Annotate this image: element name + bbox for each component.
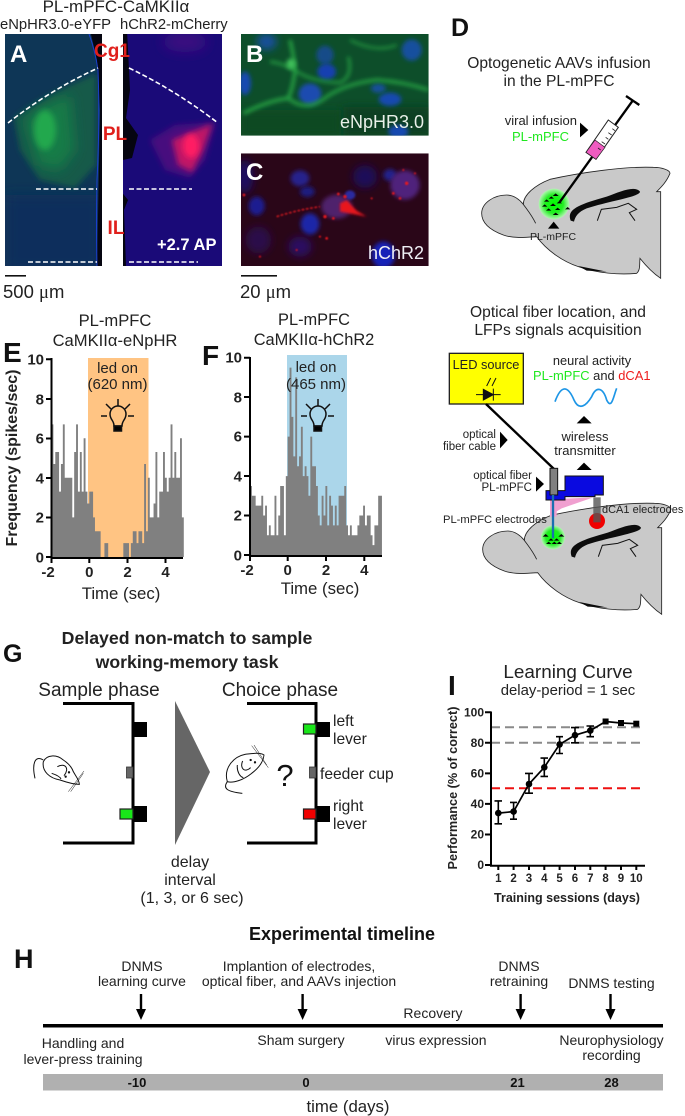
- y tick labels: 0: [36, 550, 44, 566]
- panel G: DNMS task: [3, 628, 394, 907]
- upper labels: retraining: [490, 973, 548, 989]
- cell triangles: [543, 534, 564, 544]
- label: dCA1 electrodes: dCA1 electrodes: [602, 504, 684, 516]
- upper labels: Implantion of electrodes,: [223, 958, 375, 974]
- y axis title: Frequency (spikes/sec): [4, 370, 21, 546]
- x tick labels: 4: [360, 562, 369, 579]
- label: wireless transmitter: wireless: [561, 429, 609, 444]
- label: hChR2: hChR2: [368, 243, 424, 263]
- x axis title: Time (sec): [82, 584, 160, 603]
- curve: [498, 722, 636, 813]
- icon: light bulb: [301, 399, 334, 431]
- histogram bars: [52, 424, 184, 557]
- label: viral infusion: viral infusion: [505, 113, 577, 128]
- delay label: (1, 3, or 6 sec): [140, 890, 244, 907]
- label: optical fiber cable: fiber cable: [443, 441, 496, 453]
- heading: working-memory task: [95, 652, 279, 672]
- brain with implant: [483, 503, 671, 614]
- upper labels: DNMS: [498, 958, 540, 974]
- led on window: [287, 355, 347, 555]
- x tick labels: 4: [161, 564, 170, 581]
- panel D upper: AAV infusion schematic: [451, 14, 670, 278]
- letter F: F: [202, 340, 219, 371]
- lever and cup labels: right: [333, 798, 364, 815]
- y tick labels: 8: [234, 390, 242, 406]
- label: optical fiber PL-mPFC: PL-mPFC: [482, 482, 532, 494]
- dashed region boundaries: [8, 68, 218, 262]
- delay arrow: [175, 701, 210, 845]
- arrowhead: PL-mPFC: [548, 222, 559, 229]
- fiber and electrode shaft: [549, 495, 556, 538]
- day labels: 28: [604, 1075, 619, 1090]
- axes: [485, 712, 645, 870]
- led label: (620 nm): [87, 376, 148, 393]
- histogram bars: [250, 368, 382, 555]
- brain with syringe: [482, 96, 670, 278]
- arrowhead: infusion: [580, 123, 588, 137]
- choice chamber: [247, 704, 330, 843]
- hippocampus: [571, 525, 641, 608]
- x tick labels: 8: [602, 873, 609, 885]
- brain outline: [483, 503, 671, 614]
- day labels: 21: [510, 1075, 525, 1090]
- delay label: interval: [164, 872, 216, 889]
- x tick labels: -2: [240, 562, 254, 579]
- x axis title: Time (sec): [281, 579, 359, 598]
- lever and cup labels: lever: [333, 731, 367, 748]
- x tick labels: 2: [123, 564, 132, 581]
- arrows: [136, 994, 616, 1020]
- letter B: B: [246, 41, 263, 68]
- panel I: learning curve: [446, 662, 645, 905]
- panel B: eNpHR3.0 micrograph: [239, 33, 430, 138]
- dCA1 recording site: [589, 513, 605, 529]
- panel A: brain sections: [0, 0, 228, 303]
- lower labels: recording: [582, 1047, 641, 1063]
- y tick labels: 40: [471, 797, 484, 811]
- scale bar 20 um: 20 μm: [240, 281, 291, 303]
- led label: (465 nm): [286, 376, 346, 393]
- upper labels: DNMS testing: [568, 975, 655, 991]
- letter C: C: [246, 159, 263, 186]
- lower labels: Sham surgery: [257, 1032, 345, 1048]
- day band: [43, 1074, 663, 1090]
- x tick labels: 2: [510, 873, 517, 885]
- letter D: D: [451, 14, 469, 42]
- delay label: delay: [171, 854, 209, 871]
- label: +2.7 AP: +2.7 AP: [157, 236, 216, 254]
- axis label: time (days): [306, 1097, 390, 1116]
- y tick labels: 2: [234, 508, 242, 524]
- x tick labels: 10: [630, 873, 643, 885]
- lever and cup labels: left: [333, 713, 354, 730]
- letter G: G: [3, 640, 22, 668]
- letter H: H: [14, 944, 34, 974]
- heading: PL-mPFC: [278, 311, 350, 329]
- axes: [46, 358, 183, 563]
- icon: mouse in sample phase: [34, 756, 84, 792]
- y tick labels: 10: [225, 350, 242, 366]
- y tick labels: 100: [464, 706, 484, 720]
- y tick labels: 6: [36, 430, 44, 448]
- green infusion site: [539, 189, 569, 219]
- micrograph: red section: [120, 30, 222, 266]
- label: wireless transmitter: transmitter: [554, 443, 616, 458]
- y tick labels: 4: [36, 470, 45, 488]
- hippocampus: [570, 189, 640, 272]
- label: choice phase: Choice phase: [222, 680, 338, 701]
- reference dashed lines: [491, 727, 645, 788]
- upper labels: DNMS: [121, 958, 163, 974]
- lower labels: lever-press training: [23, 1051, 143, 1067]
- lower labels: Handling and: [42, 1035, 124, 1051]
- label: LED source: LED source: [453, 357, 519, 372]
- letter E: E: [3, 337, 22, 368]
- label: optical fiber PL-mPFC: optical fiber: [473, 470, 532, 482]
- y tick labels: 6: [234, 428, 242, 446]
- panel C: hChR2 micrograph: [237, 153, 429, 268]
- arrowheads: [500, 416, 592, 492]
- label: PL-mPFC site: PL-mPFC: [530, 231, 576, 243]
- lever and cup labels: feeder cup: [320, 766, 394, 783]
- axes: [244, 357, 382, 561]
- heading: Learning Curve: [503, 662, 633, 683]
- question mark: ?: [276, 758, 294, 793]
- icon: light bulb: [101, 399, 134, 431]
- x tick labels: 5: [556, 873, 563, 885]
- label: neural activity: neural activity: [553, 353, 632, 368]
- transmitter: [546, 476, 603, 500]
- y tick labels: 0: [477, 858, 484, 872]
- region label: Cg1: Cg1: [94, 41, 130, 62]
- day labels: -10: [128, 1075, 146, 1090]
- x tick labels: 6: [572, 873, 578, 885]
- upper labels: optical fiber, and AAVs injection: [202, 973, 396, 989]
- y axis title: Performance (% of correct): [446, 707, 460, 869]
- upper labels: Recovery: [403, 1005, 463, 1021]
- heading: AAV infusion: in the PL-mPFC: [504, 73, 614, 90]
- heading: PL-mPFC: [79, 311, 151, 330]
- label: sample phase: Sample phase: [38, 680, 160, 701]
- heading: optical fiber: LFPs signals acquisition: [474, 322, 642, 339]
- y tick labels: 20: [471, 828, 484, 842]
- x tick labels: 0: [284, 562, 292, 579]
- x tick labels: 0: [85, 564, 93, 581]
- x tick labels: 2: [322, 562, 330, 579]
- y tick labels: 0: [234, 548, 242, 564]
- PL-mPFC recording site: [541, 525, 565, 549]
- hippocampal detail: [598, 539, 638, 557]
- brain outline: [482, 167, 670, 278]
- fiber cable: [486, 404, 554, 469]
- label: regions: PL-mPFC and dCA1: [533, 368, 651, 383]
- diode symbol: [476, 378, 501, 401]
- label: optical fiber cable: optical: [463, 429, 496, 441]
- lever and cup labels: lever: [333, 816, 367, 833]
- heading: optical fiber: Optical fiber location, and: [470, 304, 646, 321]
- y tick labels: 4: [234, 468, 243, 486]
- icon: mouse in choice phase: [226, 745, 268, 793]
- bulb junction: [523, 204, 536, 223]
- syringe liquid: [586, 140, 605, 159]
- letter A: A: [10, 41, 27, 68]
- sample chamber: [63, 704, 147, 843]
- x tick labels: 7: [587, 873, 594, 885]
- signal wave: [555, 388, 617, 406]
- timeline bar: [43, 1024, 663, 1028]
- syringe ticks: [598, 129, 615, 150]
- fiber ferrule: [550, 468, 558, 495]
- cell triangles: [542, 193, 570, 215]
- region label: PL: PL: [103, 124, 128, 145]
- heading: CaMKIIα-hChR2: [254, 331, 374, 349]
- panel E: eNpHR firing histogram: [3, 311, 184, 603]
- lower labels: Neurophysiology: [559, 1032, 664, 1048]
- x tick labels: 3: [526, 873, 532, 885]
- pink headcap: [550, 497, 593, 517]
- day labels: 0: [302, 1075, 310, 1090]
- syringe needle: [560, 96, 639, 202]
- hippocampal detail: [597, 203, 637, 221]
- heading: Delayed non-match to sample: [62, 628, 312, 648]
- upper labels: learning curve: [98, 973, 186, 989]
- led label: led on: [296, 359, 336, 376]
- region label: IL: IL: [108, 218, 125, 239]
- x tick labels: 4: [541, 873, 548, 885]
- dCA1 electrode: [593, 497, 601, 522]
- label: hChR2-mCherry: hChR2-mCherry: [120, 17, 228, 33]
- bulb junction: [524, 540, 537, 559]
- data points: [495, 718, 639, 816]
- y tick labels: 10: [27, 352, 44, 368]
- scale bar 500 um: 500 μm: [3, 281, 64, 303]
- heading: AAV infusion: Optogenetic AAVs infusion: [467, 55, 651, 72]
- led label: led on: [97, 360, 138, 377]
- panel F: hChR2 firing histogram: [202, 311, 382, 598]
- syringe body: [586, 120, 618, 159]
- micrograph: green section: [5, 30, 102, 271]
- label: eNpHR3.0-eYFP: eNpHR3.0-eYFP: [0, 17, 111, 33]
- y tick labels: 8: [36, 392, 44, 408]
- letter I: I: [448, 670, 456, 701]
- lower labels: virus expression: [385, 1032, 487, 1048]
- x tick labels: 9: [618, 873, 624, 885]
- label: eNpHR3.0: eNpHR3.0: [340, 112, 424, 132]
- LED box: [449, 353, 523, 404]
- y tick labels: 2: [36, 510, 44, 526]
- panel D lower: optical fiber and LFP schematic: [443, 304, 684, 614]
- y tick labels: 60: [471, 766, 484, 780]
- x axis title: Training sessions (days): [494, 891, 640, 905]
- label: PL-mPFC electrodes: PL-mPFC electrodes: [443, 514, 547, 526]
- subheading: delay-period = 1 sec: [501, 683, 636, 699]
- heading: CaMKIIα-eNpHR: [53, 331, 177, 350]
- y tick labels: 80: [471, 736, 484, 750]
- x tick labels: 1: [495, 873, 502, 885]
- label: PL-mPFC green: PL-mPFC: [512, 129, 569, 144]
- heading: Experimental timeline: [249, 924, 435, 944]
- x tick labels: -2: [41, 564, 55, 581]
- panel H: experimental timeline: [14, 924, 664, 1116]
- led on window: [88, 358, 148, 557]
- error bars: [494, 726, 594, 824]
